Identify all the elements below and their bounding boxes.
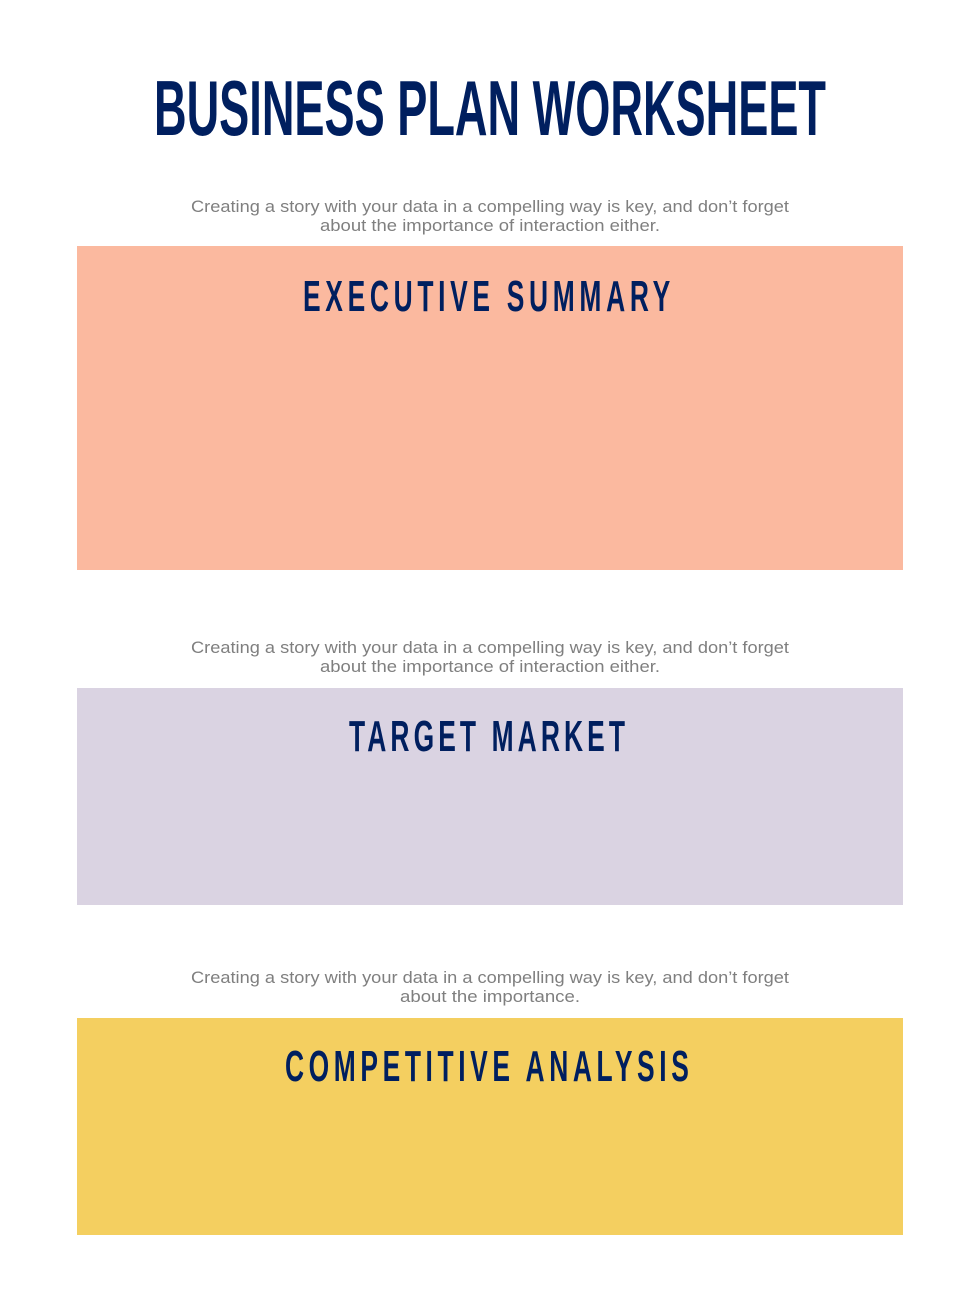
heading: target market: TARGET MARKET — [349, 711, 625, 761]
text block: competitive analysis intro: Creating a story with your data in a compelling way is key, and don’t forget — [191, 968, 789, 987]
text block: executive summary intro: about the importance of interaction either. — [320, 216, 660, 235]
text block: executive summary intro: Creating a story with your data in a compelling way is key, and don’t forget — [191, 197, 789, 216]
panel: target market — [77, 688, 903, 905]
text block: executive summary intro — [191, 197, 789, 235]
panel: competitive analysis — [77, 1018, 903, 1235]
text block: target market intro: about the importance of interaction either. — [320, 657, 660, 676]
text block: target market intro: Creating a story with your data in a compelling way is key, and don’t forget — [191, 638, 789, 657]
heading: executive summary: EXECUTIVE SUMMARY — [303, 271, 670, 321]
heading: competitive analysis: COMPETITIVE ANALYSIS — [285, 1041, 689, 1091]
text block: competitive analysis intro: about the importance. — [400, 987, 580, 1006]
text block: target market intro — [191, 638, 789, 676]
text block: competitive analysis intro — [191, 968, 789, 1006]
panel: executive summary — [77, 246, 903, 570]
